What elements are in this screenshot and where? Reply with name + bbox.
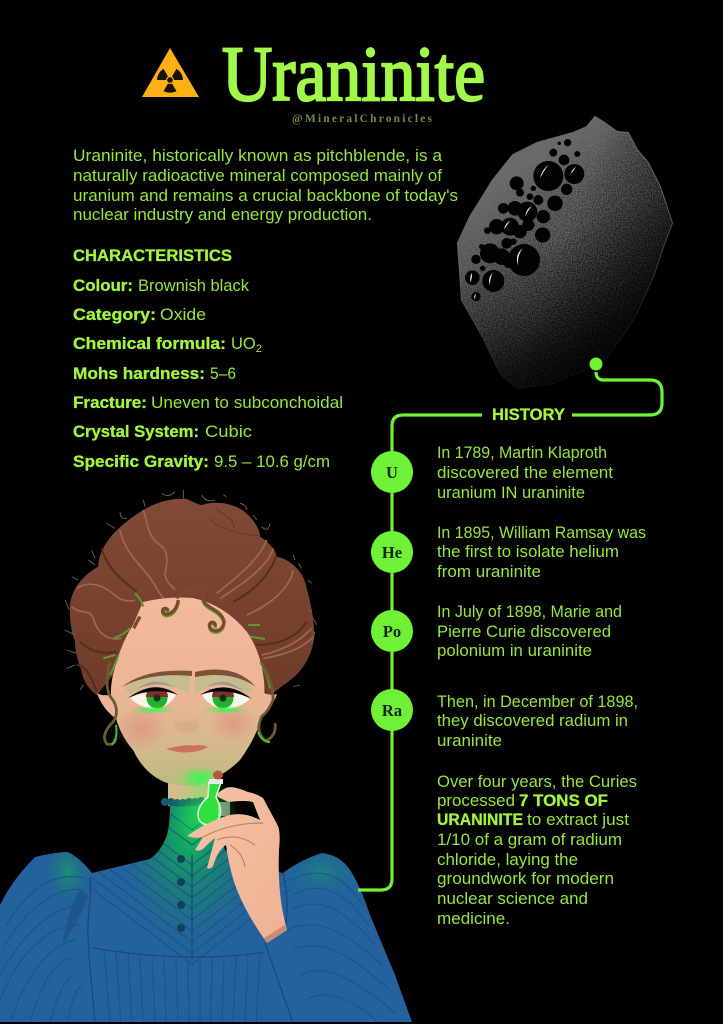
badge Po [371,610,413,652]
specific gravity row: Specific Gravity: [73,453,209,471]
chemical formula row [73,335,262,355]
fracture row [73,394,343,412]
face [111,598,265,786]
eyes [128,686,252,714]
history entry seven tons: groundwork for modern [437,870,614,888]
dress [0,805,412,1022]
specific gravity row [73,453,330,471]
history entry seven tons: 7 TONS OF [519,792,608,810]
specific gravity row: 9.5 – 10.6 g/cm [214,453,330,471]
illustration: uraninite rock [458,117,672,388]
stray hairs [65,490,317,690]
neck [168,775,215,806]
timeline badges [371,451,413,731]
history entry seven tons: chloride, laying the [437,851,578,869]
history entry July 1898 [437,603,622,660]
light hair strands [72,510,313,658]
timeline line [358,415,482,890]
chemical formula row: Chemical formula: [73,335,226,353]
connector dot [590,358,602,370]
side curls [105,662,275,744]
history entry 1789: uranium IN uraninite [437,484,585,502]
history entry 1895: In 1895, William Ramsay was [437,524,646,542]
nose [174,720,200,733]
intro text block: uranium and remains a crucial backbone of today's [73,187,458,205]
buttons [177,855,185,932]
badge Po: Po [383,622,401,641]
fracture row: Fracture: [73,394,147,412]
history entry July 1898: Pierre Curie discovered [437,623,611,641]
history entry seven tons: nuclear science and [437,890,588,908]
hand [187,787,287,943]
dark hair folds [77,548,307,692]
eye sockets [125,672,253,695]
badge Ra: Ra [382,701,402,720]
handle: @MineralChronicles [292,113,433,125]
ears [97,690,277,718]
history entry December 1898: they discovered radium in [437,712,628,730]
history entry December 1898 [437,693,638,750]
history entry July 1898: In July of 1898, Marie and [437,603,622,621]
characteristics panel [73,247,343,471]
illustration: Marie Curie portrait [0,490,412,1024]
history entry seven tons: URANINITE [437,811,523,829]
intro text block: Uraninite, historically known as pitchblende, is a [73,147,443,165]
chemical formula row: UO [231,335,256,353]
history entry 1789: In 1789, Martin Klaproth [437,444,607,462]
mohs hardness row: 5–6 [210,365,236,383]
colour row: Brownish black [138,277,250,295]
collar frill [161,797,205,807]
crystal system row: Crystal System: [73,423,199,441]
intro text block: naturally radioactive mineral composed mainly of [73,167,442,185]
seams [88,855,293,1023]
history entry seven tons: 1/10 of a gram of radium [437,831,622,849]
badge He: He [382,543,402,562]
connector line and history heading [358,358,662,890]
mouth [166,745,208,753]
connector to rock [572,372,662,415]
characteristics heading: CHARACTERISTICS [73,247,232,265]
history entry seven tons: Over four years, the Curies [437,773,637,791]
badge U: U [386,463,398,482]
green vial [171,770,239,846]
eyebrows [122,670,256,687]
badge U [371,451,413,493]
colour row [73,277,250,295]
mohs hardness row: Mohs hardness: [73,365,205,383]
category row: Category: [73,306,156,324]
history entry seven tons: processed [437,792,515,810]
intro text block [73,147,458,224]
blush [115,703,257,751]
glow on dress [132,805,238,930]
history entry December 1898: uraninite [437,732,502,750]
crystal system row: Cubic [205,423,252,441]
colour row: Colour: [73,277,133,295]
history entry 1895: the first to isolate helium [437,543,619,561]
title: Uraninite [222,30,485,117]
badge Ra [371,689,413,731]
category row [73,306,206,324]
rock bubbles [465,139,584,301]
history entry 1789 [437,444,613,502]
category row: Oxide [160,306,206,324]
history heading: HISTORY [492,405,566,424]
intro text block: nuclear industry and energy production. [73,206,372,224]
hair [65,490,317,698]
hair curls [103,585,270,688]
crystal system row [73,423,252,441]
history entry 1789: discovered the element [437,464,613,482]
icon: radiation warning triangle [142,48,199,97]
history entry 1895: from uraninite [437,563,541,581]
badge He [371,531,413,573]
glow on chin [178,766,222,790]
history entry December 1898: Then, in December of 1898, [437,693,638,711]
history entry seven tons [437,773,637,928]
history entry seven tons: to extract just [527,811,629,829]
chemical formula row: 2 [256,343,262,355]
fracture row: Uneven to subconchoidal [151,394,343,412]
history entry July 1898: polonium in uraninite [437,642,592,660]
history entry seven tons: medicine. [437,910,510,928]
history entry 1895 [437,524,646,581]
